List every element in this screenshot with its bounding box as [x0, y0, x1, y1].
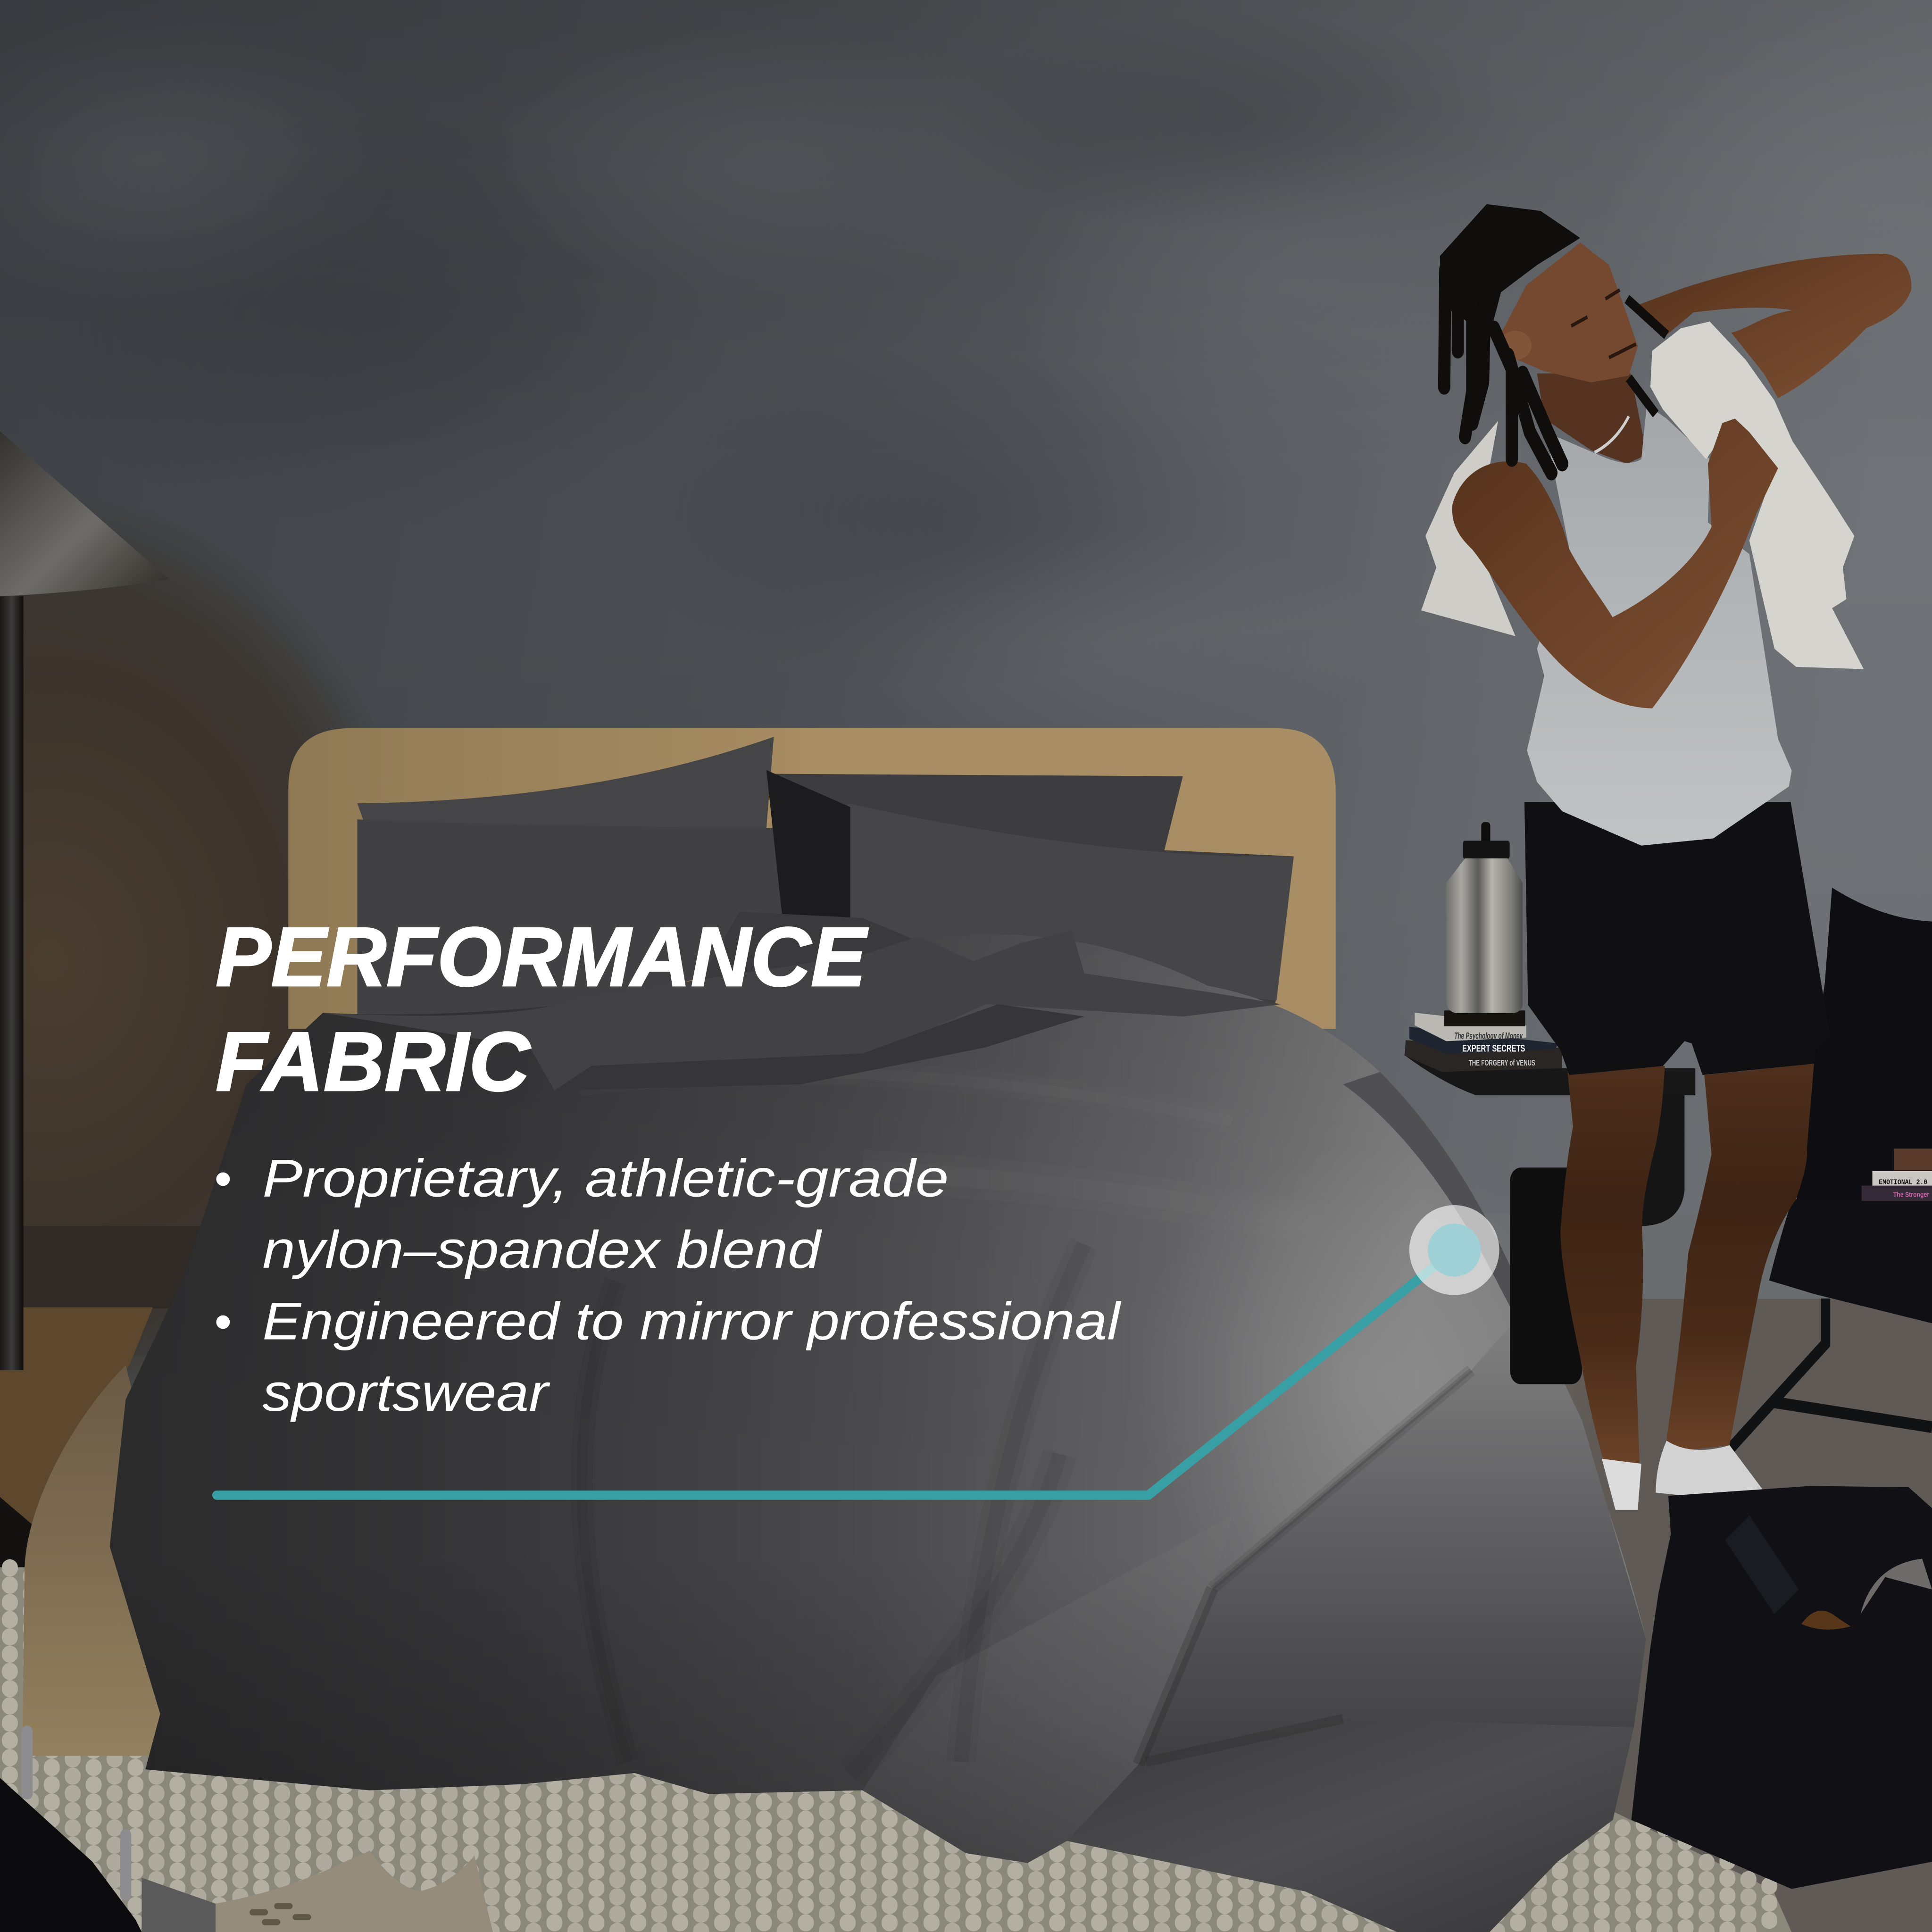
duvet right side panel: [1343, 1072, 1590, 1454]
duffel bag: [1632, 1486, 1932, 1889]
book spine labels: EXPERT SECRETS: [1462, 1043, 1525, 1054]
man: [1421, 204, 1911, 1510]
book spine labels: [1454, 1031, 1535, 1067]
turned-back sheet folds: [323, 930, 1282, 1091]
duvet folds: [579, 1072, 1471, 1774]
left nightstand: [0, 1307, 153, 1525]
front duvet fall: [863, 1516, 1232, 1863]
right baseboard: [1337, 1214, 1932, 1306]
warm lamp glow on lower left wall: [0, 493, 431, 1429]
front arm: [1452, 418, 1778, 708]
chair book spine labels: The Stronger: [1893, 1191, 1929, 1199]
hair: [1440, 204, 1580, 333]
baseboard: [0, 1226, 296, 1308]
duvet: [109, 930, 1646, 1932]
middle duvet drape: [1139, 1306, 1646, 1765]
dreadlocks: [1444, 270, 1562, 473]
title: [216, 910, 868, 1108]
front dreadlocks: [1627, 299, 1666, 414]
ear: [1499, 331, 1532, 360]
facial shading: [1571, 290, 1636, 358]
torso, arms and head: [1421, 204, 1911, 846]
bedside table with books: [1404, 1010, 1695, 1384]
rug: [0, 1567, 1791, 1932]
back towel: [1421, 421, 1516, 636]
legs and shorts: [1524, 802, 1830, 1510]
duvet highlight: [1133, 1146, 1602, 1614]
lower duvet heap: [1067, 1719, 1634, 1932]
water bottle: [1446, 822, 1523, 1013]
callout marker: [1409, 1205, 1499, 1295]
callout connector line: [217, 1250, 1454, 1495]
dark floor under nightstand: [0, 1479, 148, 1590]
bullet list: Proprietary, athletic-grade: [262, 1148, 949, 1208]
headboard: [288, 728, 1336, 1029]
bullet list: nylon–spandex blend: [262, 1220, 823, 1279]
white towel: [1650, 322, 1864, 669]
chair with cushion and books: [1732, 888, 1932, 1448]
chair book spine labels: EMOTIONAL 2.0: [1879, 1179, 1927, 1186]
bed frame: [22, 1365, 185, 1756]
wood floor: [1454, 1299, 1932, 1932]
suitcase: [0, 1731, 216, 1932]
tank top: [1527, 405, 1792, 846]
raised arm: [1636, 254, 1911, 398]
book spine labels: THE FORGERY of VENUS: [1469, 1059, 1535, 1067]
pillows: [358, 737, 1294, 1023]
bullet list: [216, 1148, 1122, 1422]
chair book spine labels: [1879, 1179, 1929, 1199]
shoe: [216, 1851, 493, 1932]
wall background: [0, 0, 1932, 1355]
necklace: [1595, 416, 1629, 452]
bullet list: sportswear: [262, 1363, 551, 1422]
neck: [1537, 374, 1647, 464]
bullet list: Engineered to mirror professional: [262, 1291, 1122, 1351]
title: FABRIC: [216, 1015, 531, 1108]
face: [1500, 242, 1638, 383]
title: PERFORMANCE: [216, 910, 868, 1004]
lamp: [0, 431, 169, 1370]
book spine labels: The Psychology of Money: [1454, 1031, 1523, 1041]
